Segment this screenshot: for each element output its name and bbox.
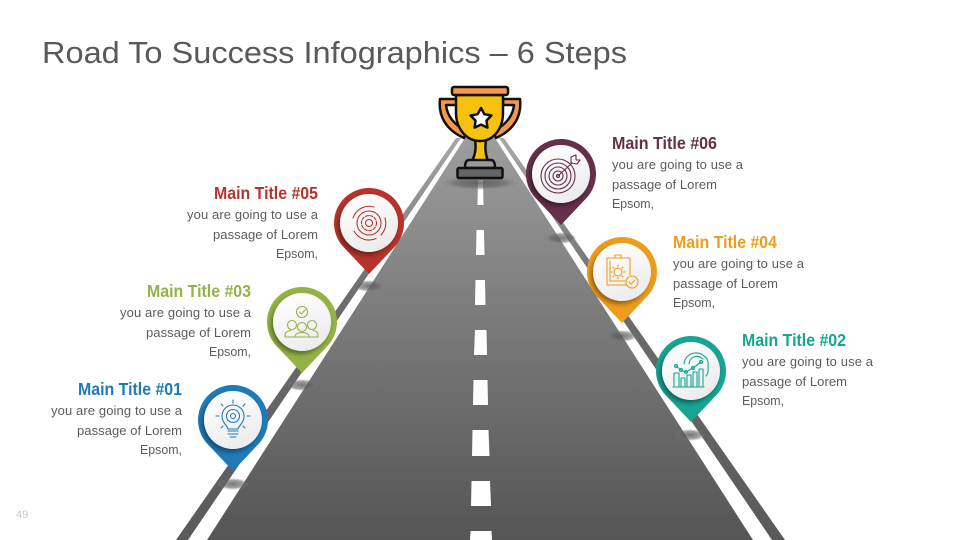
text block 03: Epsom, xyxy=(209,344,251,359)
text block 01: Main Title #01 xyxy=(78,379,182,399)
road xyxy=(176,138,785,540)
pin 02: teal xyxy=(656,336,726,422)
text block 06: Main Title #06 xyxy=(612,133,717,153)
text block 03: Main Title #03 xyxy=(147,281,251,301)
text block 06 xyxy=(612,133,744,211)
icon: light bulb xyxy=(216,400,250,437)
icon: target xyxy=(541,155,580,193)
text block 06: you are going to use a xyxy=(612,157,744,172)
trophy stem xyxy=(472,140,488,161)
pin 06: maroon xyxy=(526,139,596,225)
text block 05: you are going to use a xyxy=(187,207,319,222)
text block 01: Epsom, xyxy=(140,442,182,457)
text block 02: you are going to use a xyxy=(742,354,874,369)
text block 06: Epsom, xyxy=(612,196,654,211)
road white shoulders xyxy=(188,138,772,540)
trophy shadow xyxy=(441,176,519,190)
trophy base xyxy=(465,160,495,168)
pin 05: red xyxy=(334,188,404,274)
text block 05 xyxy=(187,183,319,261)
trophy star xyxy=(471,108,491,128)
text block 02: Epsom, xyxy=(742,393,784,408)
road side lines xyxy=(176,138,785,540)
text block 03: you are going to use a xyxy=(120,305,252,320)
text block 01 xyxy=(51,379,183,457)
text block 03 xyxy=(120,281,252,359)
pin 03: green xyxy=(267,287,337,373)
trophy lid xyxy=(452,87,508,95)
text block 04: Epsom, xyxy=(673,295,715,310)
icon: trophy xyxy=(440,87,520,178)
text block 06: passage of Lorem xyxy=(612,177,717,192)
icon: team xyxy=(285,306,318,337)
text block 05: Epsom, xyxy=(276,246,318,261)
text block 04: you are going to use a xyxy=(673,256,805,271)
trophy cup xyxy=(456,95,503,141)
text block 03: passage of Lorem xyxy=(146,325,251,340)
text block 04: Main Title #04 xyxy=(673,232,777,252)
text block 04 xyxy=(673,232,805,310)
text block 05: passage of Lorem xyxy=(213,227,318,242)
text block 02 xyxy=(742,330,874,408)
text block 05: Main Title #05 xyxy=(214,183,318,203)
pin shadows xyxy=(217,232,706,490)
text block 02: passage of Lorem xyxy=(742,374,847,389)
text block 02: Main Title #02 xyxy=(742,330,846,350)
pin 04: orange xyxy=(587,237,657,323)
title: Road To Success Infographics – 6 Steps xyxy=(42,35,627,70)
text block 01: you are going to use a xyxy=(51,403,183,418)
icon: growth chart xyxy=(673,353,708,387)
trophy handles xyxy=(440,99,467,138)
text block 04: passage of Lorem xyxy=(673,276,778,291)
lane dashes xyxy=(470,180,492,540)
text block 01: passage of Lorem xyxy=(77,423,182,438)
icon: clipboard xyxy=(607,255,638,288)
road surface xyxy=(207,138,753,540)
icon: gear cycle xyxy=(353,206,386,240)
pin 01: blue xyxy=(198,385,268,471)
page number: 49 xyxy=(16,509,28,521)
